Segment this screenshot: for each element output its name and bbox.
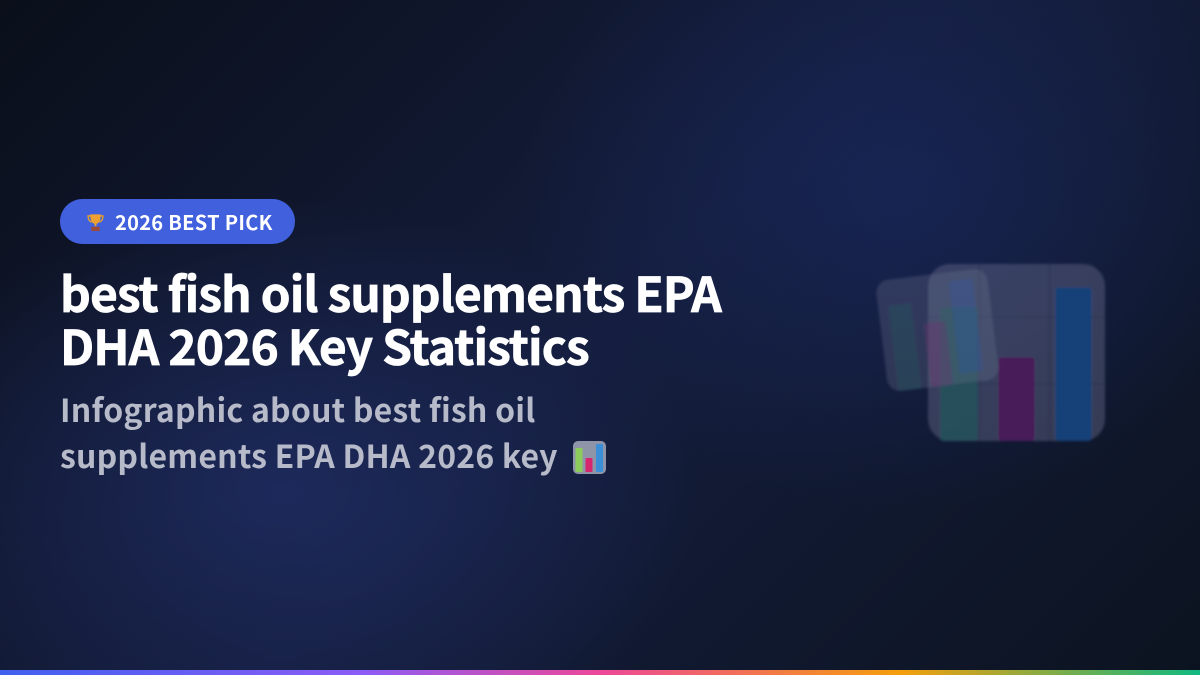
back tilted card	[875, 268, 1000, 392]
large faded bar chart icon	[876, 263, 1106, 442]
subtitle	[60, 386, 558, 478]
subtitle: supplements EPA DHA 2026 key	[60, 432, 558, 478]
title: DHA 2026 Key Statistics	[60, 309, 589, 379]
icon: trophy	[87, 214, 104, 231]
front card	[928, 264, 1105, 441]
badge: 2026 best pick	[60, 199, 295, 244]
title: best fish oil supplements EPA	[60, 256, 721, 326]
badge label: 2026 BEST PICK	[115, 207, 273, 236]
subtitle: Infographic about best fish oil	[60, 386, 536, 432]
rainbow bottom bar	[0, 670, 1200, 675]
icon: small bar chart	[573, 441, 606, 474]
title	[60, 256, 722, 379]
